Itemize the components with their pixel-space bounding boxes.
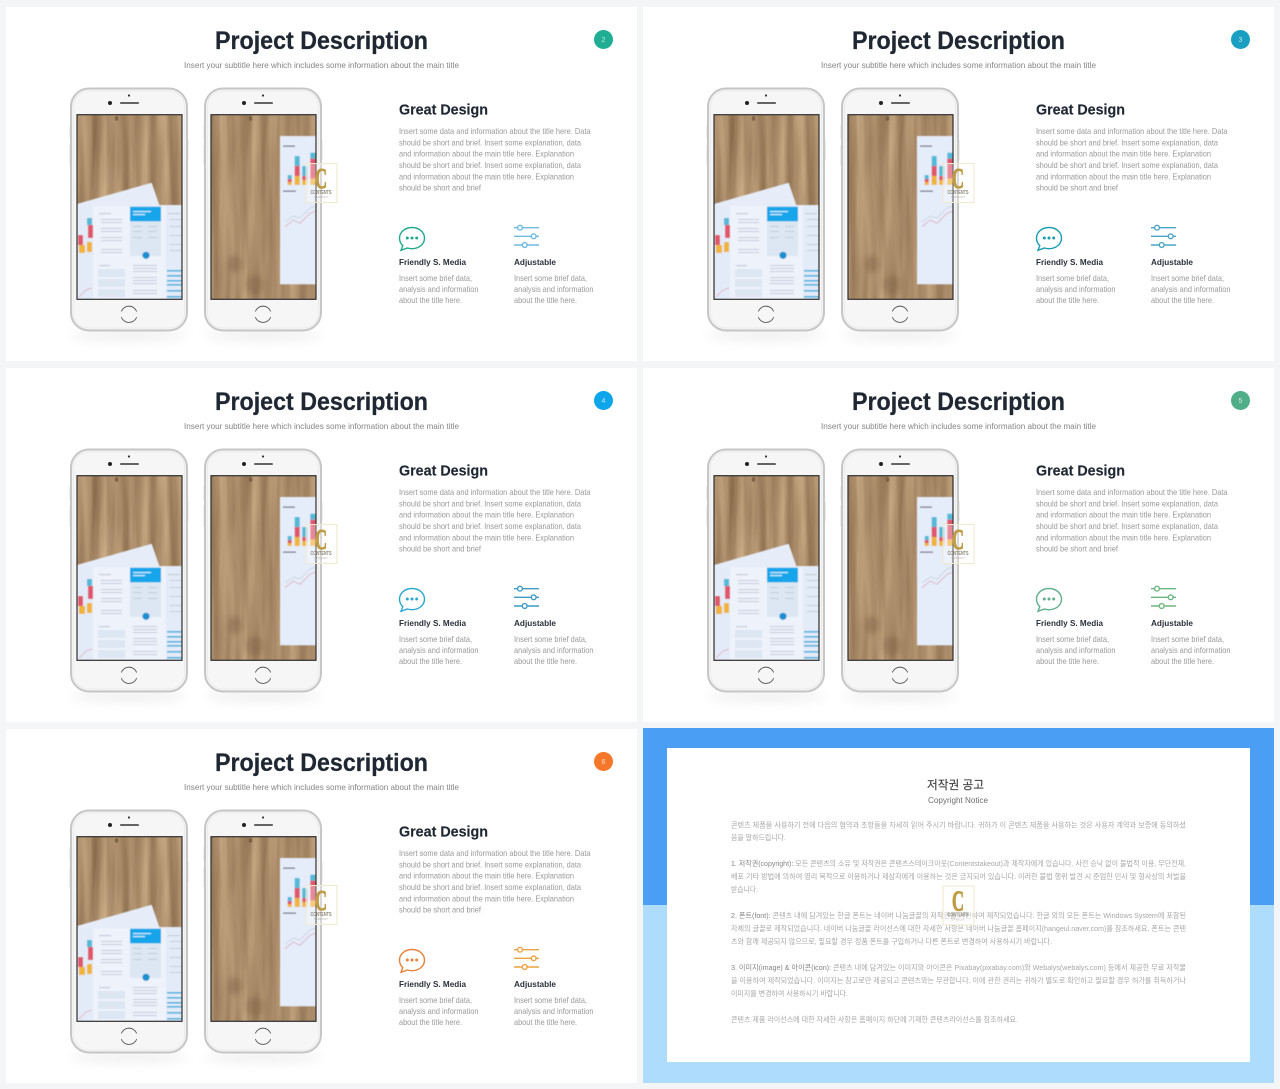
- body text: and information about the main title here. Explanation: [1036, 171, 1211, 181]
- body text: and information about the main title here. Explanation: [399, 149, 574, 159]
- title: Project Description: [852, 27, 1065, 55]
- icon: sliders: [1151, 586, 1176, 608]
- watermark: [306, 885, 337, 924]
- subtitle: Insert your subtitle here which includes some information about the main title: [821, 60, 1096, 70]
- feature: friendly s. media: Friendly S. Media: [1036, 618, 1103, 628]
- body text: [399, 126, 591, 193]
- body text: and information about the main title here. Explanation: [399, 510, 574, 520]
- feature: adjustable: about the title here.: [1151, 656, 1214, 666]
- notice section 2: 자체의 글꼴로 제작되었습니다. 네이버 나눔글꼴 라이선스에 대한 자세한 사항은 네이버 나눔글꼴 홈페이지(hangeul.naver.com)를 참조하세요. 폰트는 콘텐: [731, 923, 1186, 933]
- body text: and information about the main title here. Explanation: [399, 171, 574, 181]
- notice section 3: [731, 962, 1186, 998]
- watermark: [943, 163, 974, 202]
- feature: friendly s. media: Friendly S. Media: [1036, 257, 1103, 267]
- body text: Insert some data and information about the title here. Data: [1036, 126, 1228, 136]
- body text: and information about the main title here. Explanation: [399, 532, 574, 542]
- page number badge: [1231, 391, 1250, 410]
- feature: adjustable: Insert some brief data,: [1151, 273, 1224, 283]
- body text: should be short and brief. Insert some explanation, data: [1036, 521, 1218, 531]
- phone mockup: left: [69, 88, 189, 340]
- notice section 1: 배포 기타 방법에 의하여 영리 목적으로 이용하거나 제삼자에게 이용하는 것은 금지되어 있습니다. 이러한 불법 행위 발견 시 준엄한 민사 및 형사상의 처벌을: [731, 871, 1186, 881]
- body text: [399, 487, 591, 554]
- feature: adjustable: [514, 618, 594, 666]
- watermark: CONTENTS: [310, 190, 332, 196]
- page number badge: 5: [1239, 398, 1243, 405]
- notice title: 저작권 공고: [927, 778, 984, 792]
- feature: friendly s. media: about the title here.: [399, 1017, 462, 1027]
- subtitle: Insert your subtitle here which includes some information about the main title: [184, 60, 459, 70]
- panel: copyright notice: [643, 728, 1274, 1083]
- watermark: C: [315, 885, 327, 917]
- heading: great design: Great Design: [1036, 462, 1125, 480]
- body text: should be short and brief. Insert some explanation, data: [399, 521, 581, 531]
- watermark: STAKEOUT: [951, 918, 965, 922]
- page number badge: [594, 30, 613, 49]
- panel: slide 2: [6, 7, 637, 361]
- feature: friendly s. media: [1036, 257, 1116, 305]
- watermark: [943, 886, 974, 925]
- watermark: C: [952, 886, 964, 918]
- body text: and information about the main title here. Explanation: [1036, 532, 1211, 542]
- page number badge: 2: [602, 37, 606, 44]
- feature: friendly s. media: [399, 618, 479, 666]
- watermark: STAKEOUT: [314, 556, 328, 560]
- feature: adjustable: Insert some brief data,: [1151, 634, 1224, 644]
- subtitle: Insert your subtitle here which includes some information about the main title: [184, 782, 459, 792]
- title: Project Description: [852, 388, 1065, 416]
- notice section 3: 이미지를 변경하여 사용하시기 바랍니다.: [731, 988, 848, 998]
- feature: friendly s. media: [1036, 618, 1116, 666]
- notice section 1: [731, 858, 1186, 894]
- body text: should be short and brief. Insert some explanation, data: [399, 859, 581, 869]
- notice section 2: [731, 910, 1186, 946]
- body text: should be short and brief: [399, 905, 482, 915]
- heading: great design: Great Design: [1036, 102, 1125, 118]
- feature: adjustable: [1151, 618, 1231, 666]
- feature: adjustable: Insert some brief data,: [514, 273, 587, 283]
- feature: friendly s. media: [399, 979, 479, 1027]
- phone mockup: left: [69, 450, 189, 701]
- body text: should be short and brief: [399, 183, 482, 193]
- notice section 1: 1. 저작권(copyright): 모든 콘텐츠의 소유 및 저작권은 콘텐츠스테이크아웃(Contentstakeout)과 제작자에게 있습니다. 사전 승낙 없이 불법적 이용, 무단전재,: [731, 858, 1186, 868]
- watermark: [306, 163, 337, 202]
- watermark: [306, 524, 337, 564]
- body text: and information about the main title here. Explanation: [1036, 149, 1211, 159]
- page number badge: [594, 752, 613, 771]
- watermark: STAKEOUT: [314, 195, 328, 199]
- page number badge: 6: [602, 759, 606, 766]
- title: Project Description: [215, 27, 428, 55]
- feature: adjustable: analysis and information: [1151, 645, 1231, 655]
- body text: Insert some data and information about the title here. Data: [399, 487, 591, 497]
- feature: adjustable: Adjustable: [1151, 618, 1193, 628]
- feature: friendly s. media: analysis and information: [1036, 645, 1116, 655]
- notice section 2: 2. 폰트(font): 콘텐츠 내에 담겨있는 한글 폰트는 네이버 나눔글꼴의 저작권을 기반하여 제작되었습니다. 한글 외의 모든 폰트는 Windows System에 포함된: [731, 910, 1186, 920]
- feature: adjustable: Insert some brief data,: [514, 995, 587, 1005]
- panel: slide 6: [6, 729, 637, 1083]
- icon: chat bubble: [400, 228, 424, 250]
- feature: friendly s. media: Insert some brief data,: [1036, 273, 1109, 283]
- icon: chat bubble: [400, 950, 424, 972]
- icon: sliders: [514, 947, 539, 969]
- page number badge: [594, 391, 613, 410]
- feature: adjustable: [514, 979, 594, 1027]
- body text: and information about the main title here. Explanation: [399, 893, 574, 903]
- feature: friendly s. media: analysis and information: [399, 645, 479, 655]
- feature: adjustable: Adjustable: [514, 618, 556, 628]
- feature: adjustable: about the title here.: [514, 295, 577, 305]
- icon: chat bubble: [1036, 228, 1062, 250]
- feature: friendly s. media: Friendly S. Media: [399, 257, 466, 267]
- notice intro: 음을 말하드립니다.: [731, 832, 786, 842]
- icon: chat bubble: [400, 588, 424, 611]
- heading: great design: Great Design: [399, 824, 488, 840]
- notice section 3: 을 이용하여 제작되었습니다. 이미지는 참고로만 제공되고 콘텐츠와는 무관합니다. 이에 관한 권리는 귀하가 별도로 확인하고 필요할 경우 허가를 취득하거나: [731, 975, 1186, 985]
- watermark: C: [315, 163, 327, 195]
- body text: should be short and brief. Insert some explanation, data: [399, 160, 581, 170]
- feature: adjustable: analysis and information: [1151, 284, 1231, 294]
- body text: should be short and brief. Insert some explanation, data: [1036, 160, 1218, 170]
- feature: friendly s. media: about the title here.: [1036, 656, 1099, 666]
- icon: sliders: [514, 225, 539, 247]
- notice subtitle: Copyright Notice: [928, 795, 988, 805]
- watermark: CONTENTS: [948, 190, 969, 196]
- feature: adjustable: analysis and information: [514, 284, 594, 294]
- feature: adjustable: Insert some brief data,: [514, 634, 587, 644]
- watermark: [943, 524, 974, 564]
- notice section 1: 받습니다.: [731, 884, 758, 894]
- feature: adjustable: Adjustable: [514, 257, 556, 267]
- phone mockup: right: [203, 450, 323, 701]
- body text: should be short and brief: [1036, 183, 1119, 193]
- body text: should be short and brief. Insert some explanation, data: [399, 882, 581, 892]
- watermark: CONTENTS: [948, 912, 969, 918]
- watermark: STAKEOUT: [314, 917, 328, 921]
- watermark: STAKEOUT: [951, 195, 965, 199]
- notice intro: [731, 820, 1186, 842]
- panel: slide 5: [643, 368, 1274, 722]
- body text: [399, 848, 591, 915]
- page number badge: 4: [602, 398, 606, 405]
- feature: friendly s. media: analysis and information: [399, 1006, 479, 1016]
- feature: friendly s. media: Friendly S. Media: [399, 979, 466, 989]
- watermark: CONTENTS: [310, 912, 332, 918]
- feature: adjustable: Adjustable: [514, 979, 556, 989]
- feature: friendly s. media: about the title here.: [399, 295, 462, 305]
- feature: friendly s. media: Insert some brief data,: [1036, 634, 1109, 644]
- body text: should be short and brief. Insert some explanation, data: [1036, 137, 1218, 147]
- phone mockup: right: [203, 88, 323, 340]
- heading: great design: Great Design: [399, 102, 488, 118]
- phone mockup: right: [840, 88, 960, 340]
- notice intro: 콘텐츠 제품을 사용하기 전에 다음의 협약과 조항들을 자세히 읽어 주시기 바랍니다. 귀하가 이 콘텐츠 제품을 사용하는 것은 사용자 계약과 보증에 동의하셨: [731, 820, 1186, 830]
- subtitle: Insert your subtitle here which includes some information about the main title: [821, 421, 1096, 431]
- phone mockup: left: [69, 810, 189, 1062]
- feature: adjustable: about the title here.: [514, 656, 577, 666]
- page number badge: 3: [1239, 37, 1243, 44]
- watermark: C: [315, 524, 327, 556]
- watermark: CONTENTS: [310, 551, 332, 557]
- body text: Insert some data and information about the title here. Data: [1036, 487, 1228, 497]
- notice section 3: 3. 이미지(image) & 아이콘(icon): 콘텐츠 내에 담겨있는 이미지와 아이콘은 Pixabay(pixabay.com)와 Webalys(webalys.com) 등에서 제공한 무료 저작물: [731, 962, 1186, 972]
- icon: sliders: [514, 586, 539, 608]
- body text: should be short and brief: [1036, 544, 1119, 554]
- body text: should be short and brief: [399, 544, 482, 554]
- heading: great design: Great Design: [399, 462, 488, 480]
- feature: adjustable: Adjustable: [1151, 257, 1193, 267]
- body text: and information about the main title here. Explanation: [399, 871, 574, 881]
- feature: friendly s. media: analysis and information: [1036, 284, 1116, 294]
- phone mockup: left: [706, 450, 826, 701]
- feature: friendly s. media: analysis and information: [399, 284, 479, 294]
- feature: adjustable: [514, 257, 594, 305]
- body text: should be short and brief. Insert some explanation, data: [399, 137, 581, 147]
- panel: slide 3: [643, 7, 1274, 361]
- notice section 2: 츠와 함께 제공되지 않으므로, 필요할 경우 정품 폰트를 구입하거나 다른 폰트로 변경하여 사용하시기 바랍니다.: [731, 936, 1052, 946]
- phone mockup: left: [706, 88, 826, 340]
- feature: friendly s. media: Friendly S. Media: [399, 618, 466, 628]
- panel: slide 4: [6, 368, 637, 722]
- icon: chat bubble: [1036, 588, 1062, 611]
- feature: friendly s. media: about the title here.: [399, 656, 462, 666]
- notice footer line: 콘텐츠 제품 라이선스에 대한 자세한 사항은 홈페이지 하단에 기재한 콘텐츠라이선스를 참조하세요.: [731, 1014, 1018, 1024]
- feature: adjustable: [1151, 257, 1231, 305]
- body text: and information about the main title here. Explanation: [1036, 510, 1211, 520]
- watermark: C: [952, 524, 964, 556]
- watermark: C: [952, 163, 964, 195]
- body text: [1036, 126, 1228, 193]
- phone mockup: right: [203, 810, 323, 1062]
- body text: Insert some data and information about the title here. Data: [399, 848, 591, 858]
- page number badge: [1231, 30, 1250, 49]
- subtitle: Insert your subtitle here which includes some information about the main title: [184, 421, 459, 431]
- feature: adjustable: about the title here.: [1151, 295, 1214, 305]
- feature: friendly s. media: about the title here.: [1036, 295, 1099, 305]
- body text: Insert some data and information about the title here. Data: [399, 126, 591, 136]
- feature: friendly s. media: [399, 257, 479, 305]
- watermark: STAKEOUT: [951, 556, 965, 560]
- feature: adjustable: analysis and information: [514, 1006, 594, 1016]
- watermark: CONTENTS: [948, 551, 969, 557]
- feature: friendly s. media: Insert some brief data,: [399, 995, 472, 1005]
- body text: should be short and brief. Insert some explanation, data: [399, 498, 581, 508]
- title: Project Description: [215, 388, 428, 416]
- icon: sliders: [1151, 225, 1176, 247]
- feature: adjustable: analysis and information: [514, 645, 594, 655]
- body text: [1036, 487, 1228, 554]
- title: Project Description: [215, 749, 428, 777]
- feature: adjustable: about the title here.: [514, 1017, 577, 1027]
- feature: friendly s. media: Insert some brief data,: [399, 634, 472, 644]
- body text: should be short and brief. Insert some explanation, data: [1036, 498, 1218, 508]
- phone mockup: right: [840, 450, 960, 701]
- feature: friendly s. media: Insert some brief data,: [399, 273, 472, 283]
